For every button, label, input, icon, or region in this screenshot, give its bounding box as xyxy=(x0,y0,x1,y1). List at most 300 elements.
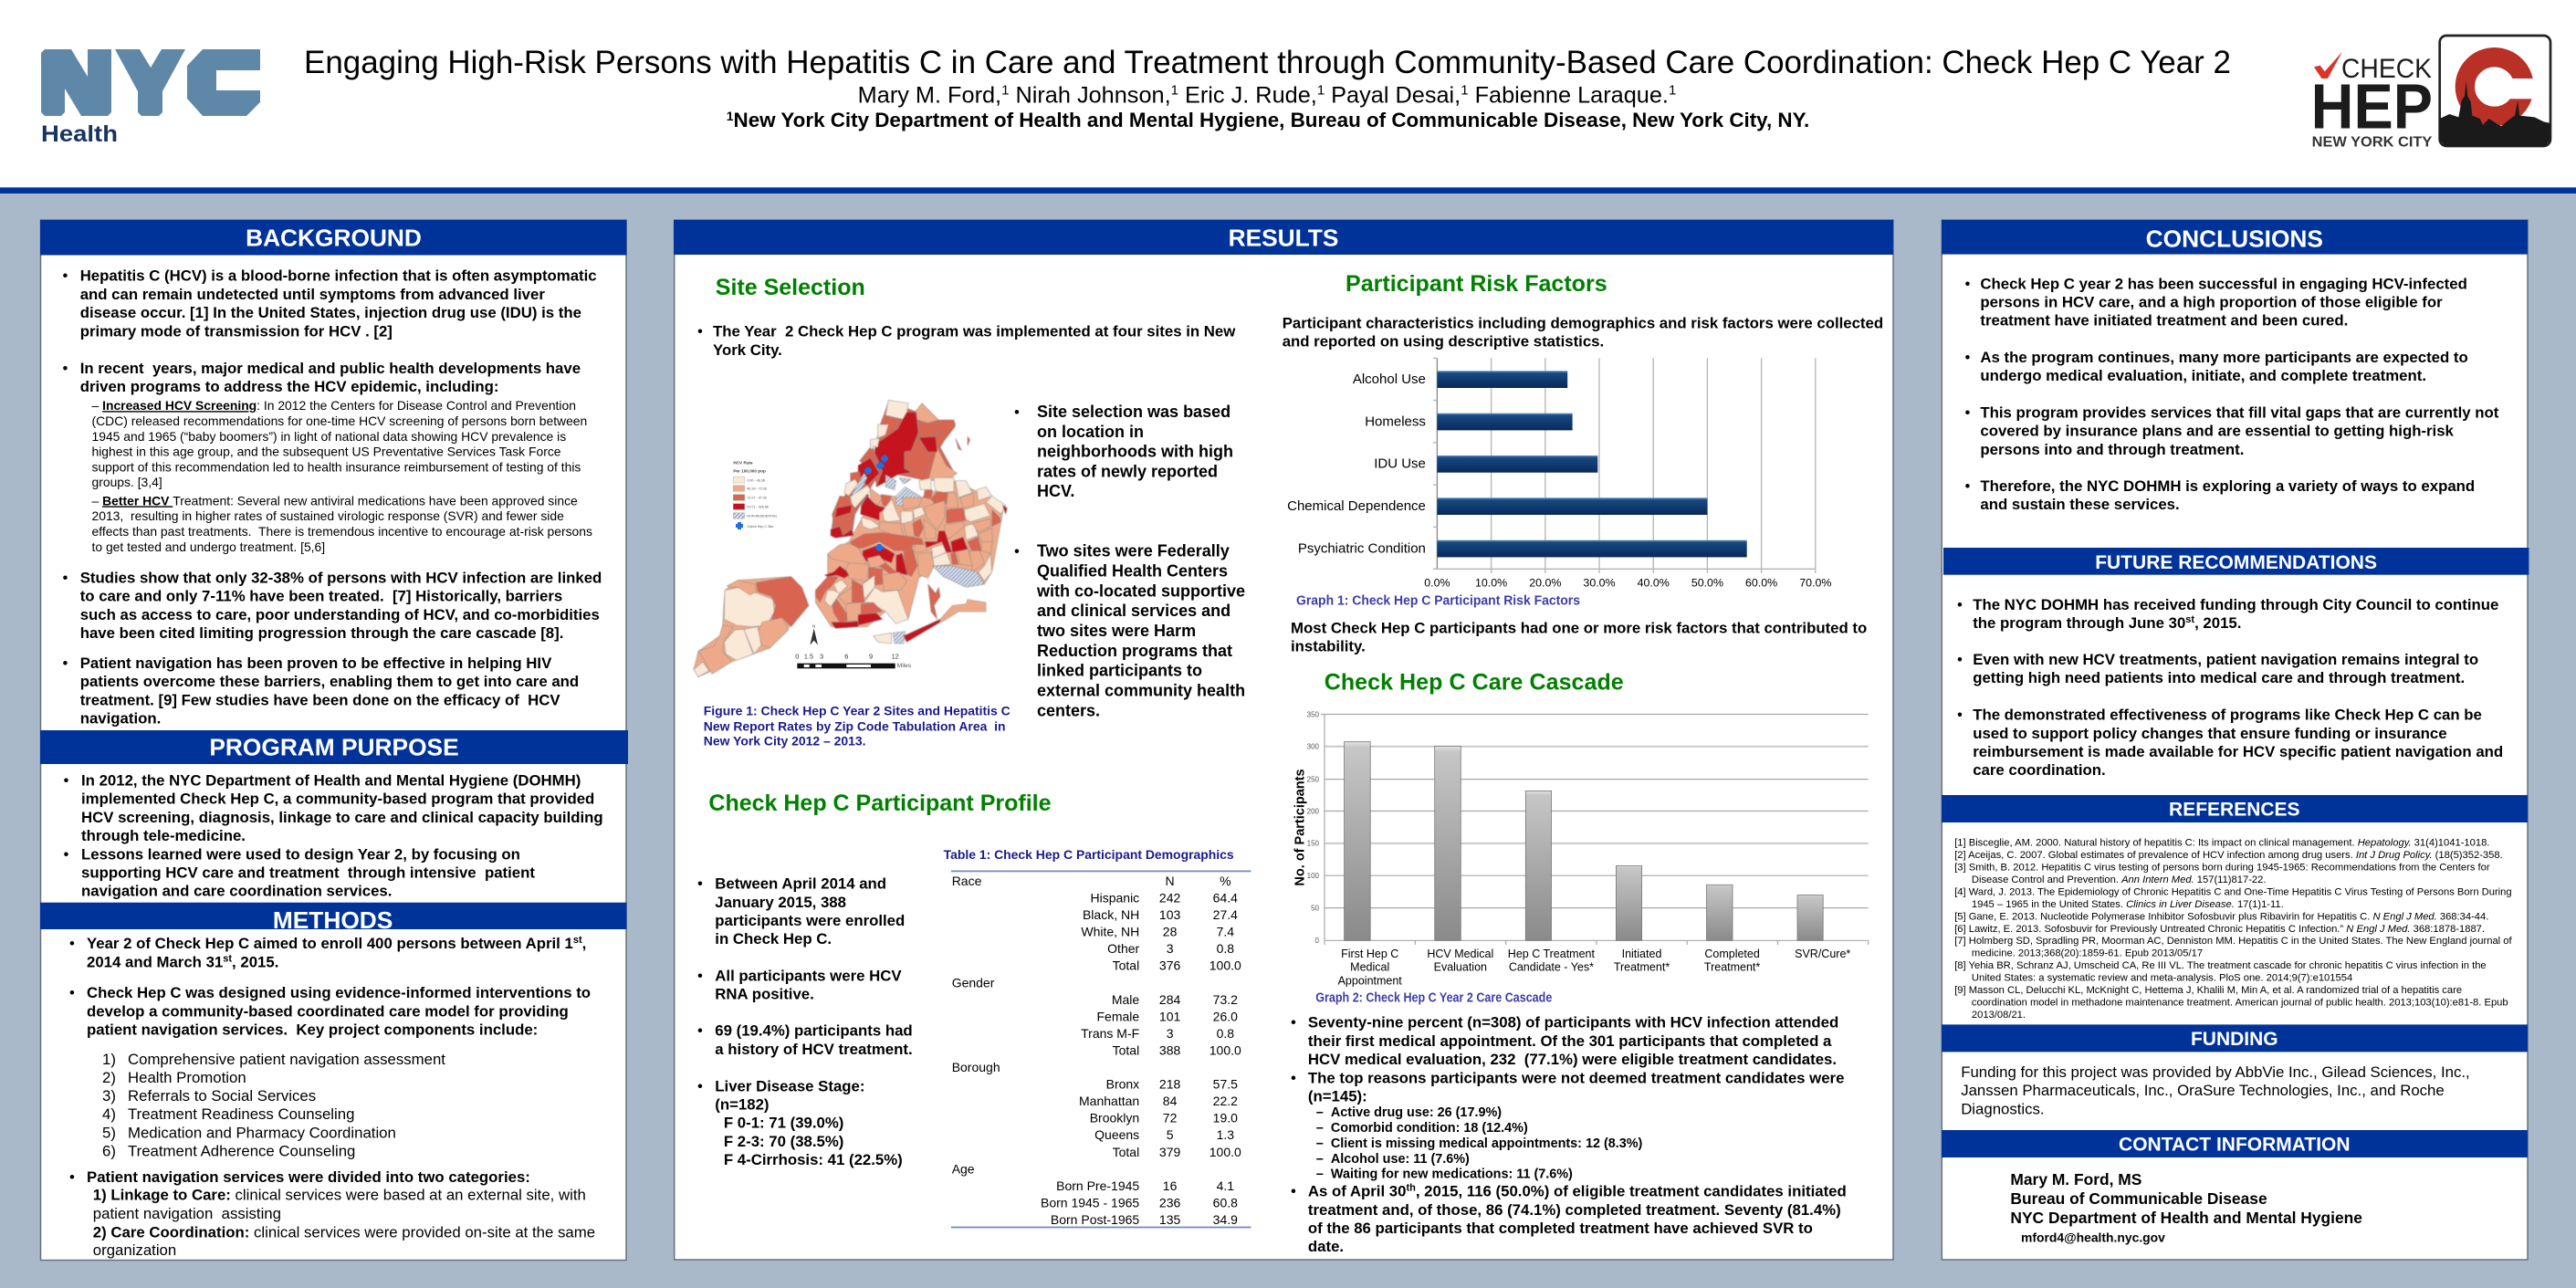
text block: characteristics: Participant characteristics including demographics and risk factors were collected xyxy=(1283,314,1883,331)
table: participant demographics: 26.0 xyxy=(1213,1009,1238,1023)
text block: vital gaps xyxy=(1964,403,2499,458)
text block: care model: develop a community-based coordinated care model for providing xyxy=(87,1002,569,1020)
text block: enrollment: January 2015, 388 xyxy=(715,894,846,911)
text block: navigation categories: • xyxy=(69,1168,75,1186)
list: key project components: 4) xyxy=(102,1105,116,1123)
table: participant demographics: Race xyxy=(952,874,982,888)
table: participant demographics: Manhattan xyxy=(1079,1094,1139,1108)
text block: patient navigation xyxy=(62,654,579,728)
heading: conclusions: CONCLUSIONS xyxy=(2146,225,2323,252)
map scale bar and north arrow: 9 xyxy=(869,653,873,661)
text block: increased HCV screening: highest in this age group, and the subsequent US Preventative Services Task Force xyxy=(91,445,561,459)
reference list xyxy=(1954,838,2513,1021)
table: participant demographics: 218 xyxy=(1159,1077,1180,1092)
text block: enrollment aim: st xyxy=(223,953,232,964)
text block: recent developments: • xyxy=(62,360,68,377)
text block: hepatitis C intro xyxy=(62,267,597,340)
logo: Check Hep C: HEP xyxy=(2311,71,2433,142)
text block: recent developments: In recent years, major medical and public health developments have xyxy=(80,360,581,377)
text block: increased HCV screening: support of this recommendation led to health insurance reimbursement of testing of this xyxy=(91,459,581,474)
text block: funding xyxy=(1961,1063,2470,1117)
map legend: Per 100,000 pop xyxy=(733,469,766,474)
text block: characteristics xyxy=(1283,314,1883,350)
table: participant demographics: Born Post-1965 xyxy=(1051,1212,1139,1227)
text block: enrollment aim: 2014 and March 31 xyxy=(87,953,223,971)
text block: program continues: • xyxy=(1964,349,1970,366)
text block: hepatitis C intro: disease occur. [1] In the United States, injection drug use (IDU) is the xyxy=(80,304,581,321)
map legend: 0.00 - 46.38 xyxy=(747,478,765,482)
text block: top reasons xyxy=(1291,1070,1844,1182)
axis labels: 30.0% xyxy=(1583,577,1616,590)
text block: funding through city council: st xyxy=(2185,614,2194,625)
y axis ticks: 300 xyxy=(1307,743,1320,751)
text block: policy changes: • xyxy=(1957,706,1963,723)
text block: program continues: As the program continues, many more participants are expected to xyxy=(1980,349,2468,366)
caption: figure 1: New Report Rates by Zip Code Tabulation Area in xyxy=(704,718,1005,733)
heading: background: BACKGROUND xyxy=(246,224,422,251)
heading: contact information xyxy=(1942,1130,2528,1157)
category labels: Alcohol Use xyxy=(1353,372,1426,387)
list: key project components: Health Promotion xyxy=(128,1069,246,1086)
text block: site selection basis: neighborhoods with high xyxy=(1037,443,1233,461)
map legend: HCV Rate xyxy=(733,461,753,466)
text block: top reasons: Waiting for new medications: 11 (7.6%) xyxy=(1331,1168,1573,1182)
map legend xyxy=(733,461,778,529)
map scale bar and north arrow: N xyxy=(812,623,815,628)
table: participant demographics: 19.0 xyxy=(1213,1111,1238,1126)
map scale bar and north arrow: 3 xyxy=(820,653,823,661)
text block: recent developments: driven programs to address the HCV epidemic, including: xyxy=(80,378,498,395)
text block: patient navigation: Patient navigation has been proven to be effective in helping HIV xyxy=(80,654,552,672)
text block: lessons learned: supporting HCV care and treatment through intensive patient xyxy=(81,864,535,882)
map scale bar and north arrow: Miles xyxy=(897,663,912,669)
table: participant demographics: White, NH xyxy=(1081,925,1139,939)
category labels: IDU Use xyxy=(1374,456,1426,472)
text block: policy changes: reimbursement is made available for HCV specific patient navigation and xyxy=(1973,743,2503,760)
text block: enrollment: Between April 2014 and xyxy=(715,875,886,893)
text block: patient navigation: navigation. xyxy=(80,710,161,728)
caption: figure 1 xyxy=(704,703,1011,749)
text block: enrollment: in Check Hep C. xyxy=(715,930,832,948)
affiliation: 1 xyxy=(727,109,734,123)
text block: increased HCV screening: groups. [3,4] xyxy=(91,475,162,489)
text block: hepatitis C intro: Hepatitis C (HCV) is a blood-borne infection that is often asymptomatic xyxy=(80,267,597,285)
table: participant demographics: 101 xyxy=(1159,1009,1180,1023)
y axis ticks: 150 xyxy=(1307,840,1320,848)
text block: studies xyxy=(62,569,602,642)
reference list: [8] Yehia BR, Schranz AJ, Umscheid CA, Re III VL. The treatment cascade for chronic hepatitis C virus infection in the xyxy=(1954,960,2487,971)
list: key project components xyxy=(102,1051,445,1159)
table: participant demographics: Borough xyxy=(952,1060,1000,1074)
table: participant demographics: Total xyxy=(1113,958,1139,973)
logo: Check Hep C xyxy=(2311,36,2550,151)
table: participant demographics: 3 xyxy=(1167,1026,1174,1041)
reference list: [4] Ward, J. 2013. The Epidemiology of Chronic Hepatitis C and One-Time Hepatitis C Virus Testing of Persons Born During xyxy=(1954,887,2512,898)
text block: navigation categories: 2) Care Coordination: clinical services were provided on-site at the same xyxy=(93,1223,595,1241)
table: participant demographics: 388 xyxy=(1159,1042,1180,1057)
text block: contact: Mary M. Ford, MS xyxy=(2010,1170,2141,1189)
reference list: United States: a systematic review and meta-analysis. PloS one. 2014;9(7):e101554 xyxy=(1972,973,2352,984)
text block: first appointment xyxy=(1291,1014,1838,1068)
table: participant demographics: Female xyxy=(1097,1009,1139,1023)
list: key project components: Comprehensive patient navigation assessment xyxy=(128,1051,445,1068)
text block: RNA positive: RNA positive. xyxy=(715,986,814,1003)
y axis ticks: 0 xyxy=(1315,937,1320,945)
table: participant demographics: Bronx xyxy=(1106,1077,1139,1092)
text block: enrollment aim: , 2015. xyxy=(232,953,278,971)
text block: contact: Bureau of Communicable Disease xyxy=(2010,1189,2267,1208)
caption: figure 1: New York City 2012 – 2013. xyxy=(704,734,865,749)
text block: success: • xyxy=(1964,275,1970,292)
text block: top reasons: – xyxy=(1316,1168,1324,1182)
text block: top reasons: • xyxy=(1291,1070,1296,1087)
table: participant demographics: Black, NH xyxy=(1083,907,1139,922)
text block: navigation integral xyxy=(1957,651,2478,686)
text block: program purpose 2012: • xyxy=(64,772,69,789)
text block: studies: • xyxy=(62,569,68,586)
axis labels xyxy=(1424,577,1831,590)
table: participant demographics: 27.4 xyxy=(1213,907,1238,922)
text block: success: treatment have initiated treatment and been cured. xyxy=(1980,312,2348,329)
heading: future recommendations xyxy=(1943,548,2529,575)
logo: Check Hep C: NEW YORK CITY xyxy=(2312,135,2433,151)
list: key project components: Treatment Adherence Counseling xyxy=(128,1142,355,1159)
text block: site types: Reduction programs that xyxy=(1037,642,1232,660)
text block: treatment history: • xyxy=(697,1022,703,1040)
text block: contact xyxy=(2010,1170,2362,1244)
text block: site types: linked participants to xyxy=(1037,662,1202,680)
text block: enrollment aim: • xyxy=(69,935,75,952)
text block: top reasons: (n=145): xyxy=(1308,1088,1367,1105)
category labels: Treatment* xyxy=(1614,961,1670,974)
reference list: [9] Masson CL, Delucchi KL, McKnight C, Hettema J, Khalili M, Min A, et al. A randomized trial of a hepatitis care xyxy=(1954,985,2462,996)
list: key project components: 6) xyxy=(102,1142,116,1159)
text block: site types xyxy=(1014,542,1245,719)
text block: patient navigation: • xyxy=(62,654,68,672)
text block: program continues xyxy=(1964,349,2468,384)
heading: results: RESULTS xyxy=(1229,224,1338,251)
text block: better HCV treatment xyxy=(91,493,592,554)
category labels: HCV Medical xyxy=(1427,948,1493,960)
icons: check hep C site markers xyxy=(864,455,888,551)
map legend: 46.39 - 72.06 xyxy=(747,487,767,491)
text block: site types: and clinical services and xyxy=(1037,602,1230,620)
text block: care model: patient navigation services. Key project components include: xyxy=(87,1021,538,1039)
text block: navigation categories: 1) Linkage to Care: clinical services were based at an external site, with xyxy=(93,1187,586,1204)
table: participant demographics: 73.2 xyxy=(1213,992,1238,1007)
category labels: Evaluation xyxy=(1434,961,1487,974)
table: participant demographics: N xyxy=(1166,874,1175,888)
axis labels: 60.0% xyxy=(1745,577,1777,590)
text block: first appointment: • xyxy=(1291,1014,1296,1031)
y axis ticks: 50 xyxy=(1311,904,1320,912)
text block: lessons learned xyxy=(64,845,535,900)
axis labels: 50.0% xyxy=(1691,577,1723,590)
table: participant demographics: Born 1945 - 1965 xyxy=(1041,1195,1139,1209)
y axis ticks: 100 xyxy=(1307,872,1320,880)
table: participant demographics: Male xyxy=(1112,992,1139,1007)
text block: navigation categories: patient navigation assisting xyxy=(93,1205,281,1222)
text block: studies: to care and only 7-11% have been treated. [7] Historically, barriers xyxy=(80,588,562,605)
table: participant demographics: Other xyxy=(1107,941,1140,956)
category labels: Chemical Dependence xyxy=(1287,498,1426,514)
reference list: 2013/08/21. xyxy=(1972,1010,2026,1021)
axis labels: 10.0% xyxy=(1475,577,1507,590)
subheading: care cascade: Check Hep C Care Cascade xyxy=(1325,669,1624,695)
text block: four sites: • xyxy=(697,323,703,340)
axis labels: 0.0% xyxy=(1424,577,1450,590)
map scale bar and north arrow: 12 xyxy=(892,653,899,661)
map scale bar and north arrow: 6 xyxy=(844,653,848,661)
text block: enrollment aim xyxy=(69,935,586,971)
text block: enrollment aim: st xyxy=(573,935,582,946)
category labels xyxy=(1287,372,1426,556)
text block: treatment history: a history of HCV treatment. xyxy=(715,1041,913,1058)
reference list: Disease Control and Prevention. Ann Intern Med. 157(11)817-22. xyxy=(1972,874,2266,885)
y axis ticks: 200 xyxy=(1307,807,1320,815)
text block: funding through city council: • xyxy=(1957,596,1963,613)
text block: success xyxy=(1964,275,2467,329)
text block: site types: external community health xyxy=(1037,682,1245,700)
text block: better HCV treatment: to get tested and undergo treatment. [5,6] xyxy=(91,539,325,554)
y axis title: No. of Participants xyxy=(1293,769,1307,886)
text block: liver disease stage: Liver Disease Stage: xyxy=(715,1077,864,1095)
list: key project components: Referrals to Social Services xyxy=(128,1087,316,1105)
text block: treatment outcomes: As of April 30 xyxy=(1308,1182,1406,1199)
list: key project components: Medication and Pharmacy Coordination xyxy=(128,1124,396,1141)
text block: risk factor summary: Most Check Hep C participants had one or more risk factors that contributed to xyxy=(1291,619,1867,636)
table: participant demographics: 284 xyxy=(1159,992,1180,1007)
authors: 1 xyxy=(1171,82,1178,99)
reference list: [2] Aceijas, C. 2007. Global estimates of prevalence of HCV infection among drug users. Int J Drug Policy. (18(5)352-358. xyxy=(1954,850,2503,861)
panel: results xyxy=(674,220,1893,1260)
text block: increased HCV screening xyxy=(91,398,587,489)
text block: success: Check Hep C year 2 has been successful in engaging HCV-infected xyxy=(1980,275,2467,292)
table: participant demographics: 100.0 xyxy=(1209,1145,1241,1159)
heading: future recommendations: FUTURE RECOMMENDATIONS xyxy=(2095,552,2377,573)
bars xyxy=(1437,371,1747,557)
text block: enrollment: • xyxy=(697,875,703,893)
text block: navigation categories: Patient navigation services were divided into two categories: xyxy=(87,1168,530,1186)
map scale bar and north arrow xyxy=(795,623,912,669)
panel: background, purpose and methods column xyxy=(40,220,628,1260)
text block: four sites: York City. xyxy=(713,341,782,359)
text block: funding: Janssen Pharmaceuticals, Inc., OraSure Technologies, Inc., and Roche xyxy=(1961,1082,2445,1099)
text block: lessons learned: • xyxy=(64,845,69,863)
text block: treatment outcomes: treatment and, of those, 86 (74.1%) completed treatment. Seventy (81.4%) xyxy=(1308,1201,1841,1219)
text block: top reasons: – xyxy=(1316,1121,1324,1136)
text block: site types: centers. xyxy=(1037,701,1100,719)
text block: liver disease stage: F 2-3: 70 (38.5%) xyxy=(724,1133,843,1150)
table: participant demographics: 103 xyxy=(1159,907,1180,922)
text block: site selection basis: rates of newly reported xyxy=(1037,462,1218,480)
table: participant demographics: 0.8 xyxy=(1217,1026,1234,1041)
text block: site selection basis: HCV. xyxy=(1037,482,1074,500)
text block: hepatitis C intro: and can remain undetected until symptoms from advanced liver xyxy=(80,286,545,303)
text block: top reasons: – xyxy=(1316,1105,1324,1120)
text block: policy changes: care coordination. xyxy=(1973,761,2106,779)
text block: studies: have been cited limiting progression through the care cascade [8]. xyxy=(80,624,563,642)
text block: first appointment: Seventy-nine percent (n=308) of participants with HCV infection attended xyxy=(1308,1014,1838,1031)
text block: lessons learned: Lessons learned were used to design Year 2, by focusing on xyxy=(81,845,520,863)
text block: program purpose 2012: through tele-medicine. xyxy=(81,827,246,844)
text block: liver disease stage xyxy=(697,1077,903,1168)
text block: navigation integral: Even with new HCV treatments, patient navigation remains integral to xyxy=(1973,651,2478,668)
affiliation: New York City Department of Health and Mental Hygiene, Bureau of Communicable Disease, New York City, NY. xyxy=(734,109,1809,131)
axis labels: 70.0% xyxy=(1799,577,1831,590)
table: participant demographics: 3 xyxy=(1167,941,1174,956)
text block: top reasons: Comorbid condition: 18 (12.4%) xyxy=(1331,1121,1528,1136)
reference list: [1] Bisceglie, AM. 2000. Natural history of hepatitis C: Its impact on clinical management. Hepatology. 31(4)1041-1018. xyxy=(1954,838,2489,849)
heading: results xyxy=(674,220,1893,255)
heading: references: REFERENCES xyxy=(2169,800,2300,821)
authors: Eric J. Rude, xyxy=(1178,82,1317,108)
text block: treatment outcomes xyxy=(1291,1182,1847,1255)
table: participant demographics: 376 xyxy=(1159,958,1180,973)
text block: first appointment: HCV medical evaluation, 232 (77.1%) were eligible treatment candidates. xyxy=(1308,1051,1837,1068)
bar chart: care cascade xyxy=(1293,710,1869,988)
text block: top reasons: The top reasons participants were not deemed treatment candidates were xyxy=(1308,1070,1844,1087)
category labels: First Hep C xyxy=(1341,948,1398,960)
text block: studies: Studies show that only 32-38% of persons with HCV infection are linked xyxy=(80,569,602,586)
text block: navigation categories: organization xyxy=(93,1241,176,1259)
text block: top reasons: – xyxy=(1316,1152,1324,1167)
text block: top reasons: – xyxy=(1316,1136,1324,1151)
text block: enrollment aim: Year 2 of Check Hep C aimed to enroll 400 persons between April 1 xyxy=(87,935,573,952)
logo: NYC Health xyxy=(41,49,260,147)
text block: care model: • xyxy=(69,984,75,1001)
category labels: Initiated xyxy=(1622,948,1661,960)
text block: liver disease stage: F 4-Cirrhosis: 41 (22.5%) xyxy=(724,1151,903,1168)
text block: funding: Diagnostics. xyxy=(1961,1101,2045,1117)
subheading: participant profile: Check Hep C Participant Profile xyxy=(708,791,1052,816)
category labels: Appointment xyxy=(1338,975,1402,988)
list: key project components: 2) xyxy=(102,1069,116,1086)
title: Engaging High-Risk Persons with Hepatitis C in Care and Treatment through Community-Based Care Coordination: Check Hep C Year 2 xyxy=(304,45,2231,80)
authors: Nirah Johnson, xyxy=(1009,82,1171,108)
table: participant demographics: Total xyxy=(1113,1145,1139,1159)
text block: RNA positive: • xyxy=(697,967,703,984)
axis labels: 40.0% xyxy=(1638,577,1670,590)
logo: NYC Health: Health xyxy=(41,121,118,147)
text block: top reasons: Active drug use: 26 (17.9%) xyxy=(1331,1105,1502,1120)
table: participant demographics: Gender xyxy=(952,975,995,990)
table: participant demographics: 1.3 xyxy=(1217,1127,1234,1142)
text block: funding: Funding for this project was provided by AbbVie Inc., Gilead Sciences, Inc., xyxy=(1961,1063,2470,1081)
axis labels: 20.0% xyxy=(1529,577,1561,590)
authors: 1 xyxy=(1317,82,1325,99)
category labels: Treatment* xyxy=(1704,961,1760,974)
text block: success: persons in HCV care, and a high proportion of those eligible for xyxy=(1980,293,2443,310)
text block: recent developments xyxy=(62,360,581,395)
map legend: Check Hep C Site xyxy=(747,525,773,529)
table: participant demographics: 16 xyxy=(1163,1178,1178,1193)
heading: methods xyxy=(40,903,626,934)
text block: hepatitis C intro: • xyxy=(62,267,68,285)
text block: sustain services: • xyxy=(1964,477,1970,495)
table: participant demographics: 84 xyxy=(1163,1094,1178,1108)
text block: treatment history xyxy=(697,1022,913,1058)
text block: vital gaps: This program provides services that fill vital gaps that are currently not xyxy=(1980,403,2499,421)
text block: site selection basis: on location in xyxy=(1037,423,1144,441)
text block: policy changes xyxy=(1957,706,2503,779)
text block: site types: Two sites were Federally xyxy=(1037,542,1230,560)
text block: characteristics: and reported on using descriptive statistics. xyxy=(1283,332,1604,350)
text block: treatment outcomes: th xyxy=(1406,1182,1416,1193)
table: participant demographics: 64.4 xyxy=(1213,891,1238,906)
text block: risk factor summary xyxy=(1291,619,1867,654)
bar chart: participant risk factors xyxy=(1287,358,1831,590)
heading: methods: METHODS xyxy=(273,906,393,934)
table: participant demographics: 60.8 xyxy=(1213,1195,1238,1209)
reference list: [7] Holmberg SD, Spradling PR, Moorman AC, Denniston MM. Hepatitis C in the United States. The New England journal of xyxy=(1954,936,2513,947)
text block: site types: Qualified Health Centers xyxy=(1037,562,1228,581)
text block: care model: Check Hep C was designed using evidence-informed interventions to xyxy=(87,984,591,1001)
text block: enrollment: participants were enrolled xyxy=(715,912,905,929)
text block: treatment outcomes: date. xyxy=(1308,1238,1344,1255)
panel: conclusions and references column xyxy=(1942,220,2529,1260)
heading: funding xyxy=(1942,1024,2528,1052)
list: key project components: Treatment Readiness Counseling xyxy=(128,1105,354,1123)
map scale bar and north arrow: 1.5 xyxy=(804,653,813,661)
table: participant demographics: 22.2 xyxy=(1213,1094,1238,1108)
text block: studies: such as access to care, poor understanding of HCV, and co-morbidities xyxy=(80,606,600,623)
text block: funding through city council: The NYC DOHMH has received funding through City Council to continue xyxy=(1973,596,2498,613)
category labels: Medical xyxy=(1350,961,1389,974)
table: participant demographics: 57.5 xyxy=(1213,1077,1238,1092)
text block: program purpose 2012 xyxy=(64,772,603,844)
table: participant demographics: 5 xyxy=(1167,1127,1174,1142)
table: participant demographics: 135 xyxy=(1159,1212,1180,1227)
table: participant demographics: Trans M-F xyxy=(1081,1026,1139,1041)
text block: increased HCV screening: (CDC) released recommendations for one-time HCV screening of persons born between xyxy=(91,414,587,428)
text block: better HCV treatment: – Better HCV Treatment: Several new antiviral medications have been approved since xyxy=(91,493,578,508)
table: participant demographics: Queens xyxy=(1094,1127,1139,1142)
heading: conclusions xyxy=(1942,220,2528,255)
category labels: SVR/Cure* xyxy=(1795,948,1850,960)
bars xyxy=(1345,742,1823,940)
table: participant demographics: 0.8 xyxy=(1217,941,1234,956)
category labels: Candidate - Yes* xyxy=(1509,961,1594,974)
list: key project components: 5) xyxy=(102,1124,116,1141)
y axis ticks: 350 xyxy=(1307,710,1320,718)
text block: funding through city council xyxy=(1957,596,2498,632)
text block: site selection basis: Site selection was based xyxy=(1037,403,1230,421)
reference list: [6] Lawitz, E. 2013. Sofosbuvir for Previously Untreated Chronic Hepatitis C Infection.” N Engl J Med. 368:1878-1887. xyxy=(1954,924,2485,935)
map: NYC zip code HCV rates xyxy=(694,400,1007,677)
text block: treatment history: 69 (19.4%) participants had xyxy=(715,1022,913,1040)
heading: program purpose xyxy=(40,730,628,764)
text block: lessons learned: navigation and care coordination services. xyxy=(81,883,392,900)
y axis ticks: 250 xyxy=(1307,775,1320,783)
category labels: Homeless xyxy=(1365,414,1426,429)
list: key project components: 1) xyxy=(102,1051,116,1068)
text block: navigation integral: getting high need patients into medical care and through treatment. xyxy=(1973,669,2465,686)
text block: hepatitis C intro: primary mode of transmission for HCV . [2] xyxy=(80,322,393,340)
text block: increased HCV screening: – Increased HCV Screening: In 2012 the Centers for Disease Control and Prevention xyxy=(91,398,576,413)
reference list: [3] Smith, B. 2012. Hepatitis C virus testing of persons born during 1945-1965: Recommendations from the Centers for xyxy=(1954,863,2490,874)
text block: treatment outcomes: , 2015, 116 (50.0%) of eligible treatment candidates initiated xyxy=(1416,1182,1847,1199)
reference list: medicine. 2013;368(20):1859-61. Epub 2013/05/17 xyxy=(1972,948,2203,959)
text block: program purpose 2012: HCV screening, diagnosis, linkage to care and clinical capacity building xyxy=(81,809,603,826)
table caption: Table 1: Check Hep C Participant Demographics xyxy=(944,847,1234,862)
text block: funding through city council: the program through June 30 xyxy=(1973,614,2185,632)
table: participant demographics: % xyxy=(1220,874,1231,888)
text block: vital gaps: covered by insurance plans and are essential to getting high-risk xyxy=(1980,422,2455,439)
text block: site selection basis: • xyxy=(1014,403,1020,421)
heading: references xyxy=(1942,795,2528,822)
map scale bar and north arrow: 0 xyxy=(795,653,799,661)
